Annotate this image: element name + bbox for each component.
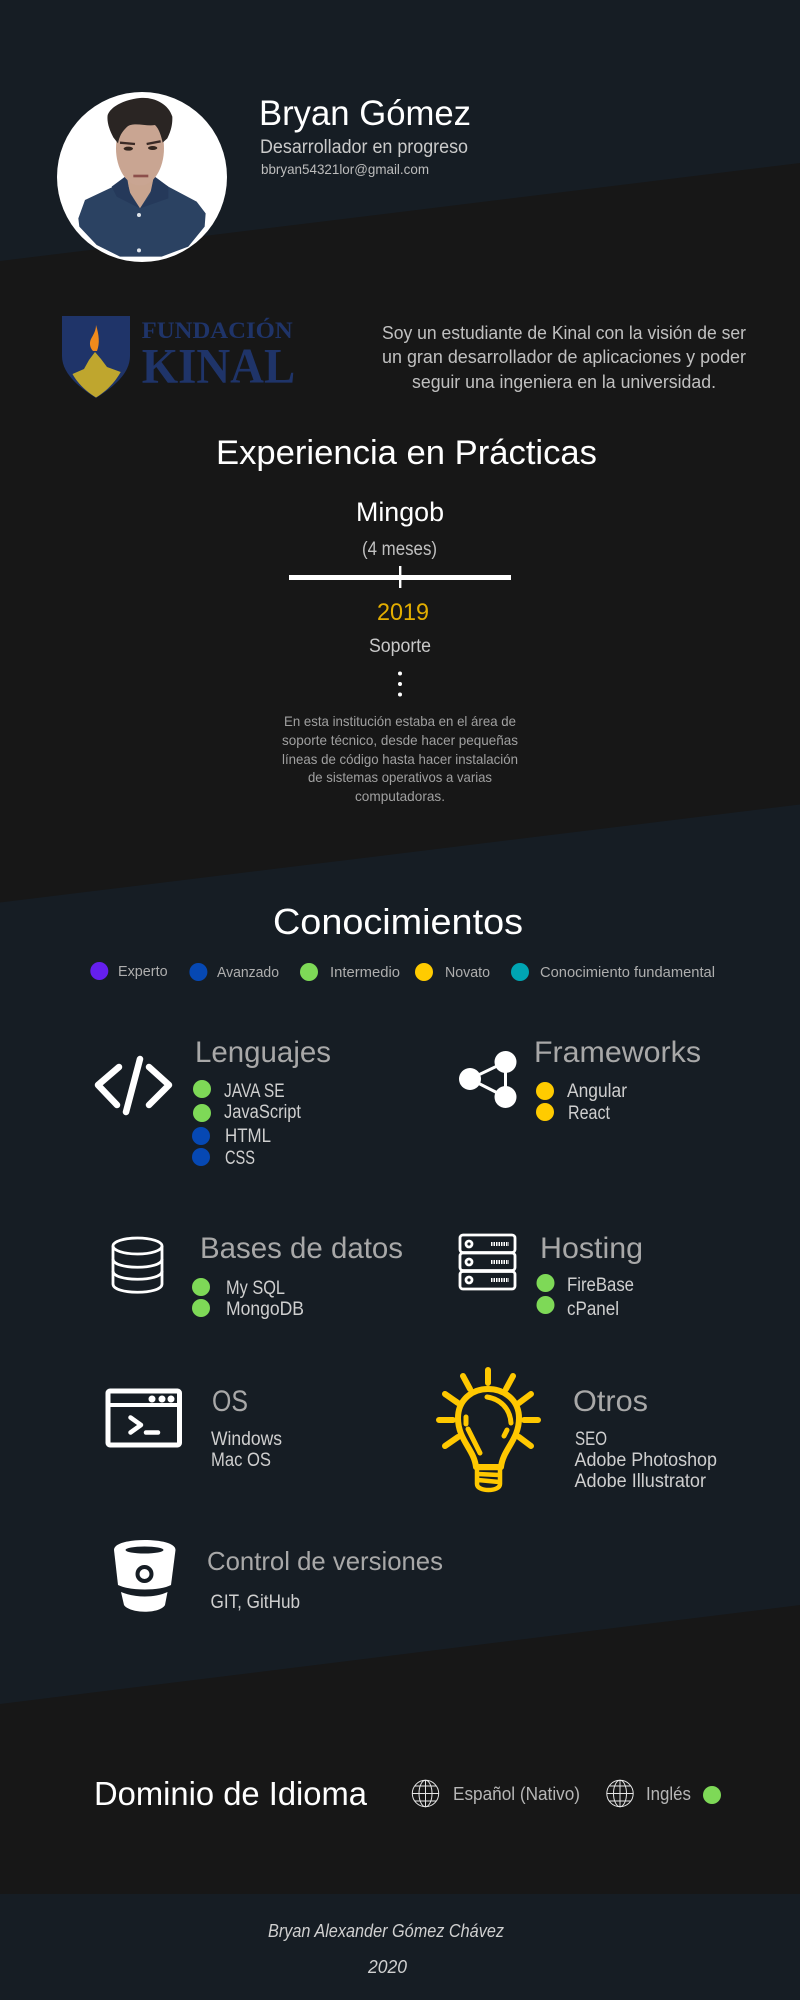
list: operating systems: Windows — [211, 1429, 282, 1450]
experience description: computadoras. — [355, 788, 445, 804]
list: languages: CSS — [225, 1148, 255, 1169]
list: hosting — [536, 1274, 634, 1320]
dots — [398, 672, 402, 696]
list: languages — [192, 1080, 302, 1169]
timeline — [289, 566, 511, 588]
list: languages: JAVA SE — [224, 1081, 285, 1102]
list: hosting: cPanel — [567, 1299, 619, 1320]
legend — [90, 962, 715, 981]
list: other tools — [574, 1429, 717, 1492]
list: frameworks: Angular — [567, 1081, 628, 1102]
icon: server — [460, 1235, 515, 1289]
experience description: En esta institución estaba en el área de — [284, 713, 516, 729]
legend: Novato — [445, 964, 490, 981]
icon: globe — [607, 1780, 633, 1807]
intro paragraph: Soy un estudiante de Kinal con la visión de ser — [382, 323, 746, 343]
list: hosting: FireBase — [567, 1275, 634, 1296]
heading: Conocimientos: Conocimientos — [273, 901, 523, 942]
logo: Fundación Kinal: KINAL — [142, 338, 295, 394]
version control tools: GIT, GitHub — [210, 1592, 300, 1613]
list: databases: My SQL — [226, 1278, 285, 1299]
logo: Fundación Kinal — [62, 316, 295, 398]
legend: Avanzado — [217, 964, 279, 981]
list: frameworks — [536, 1081, 628, 1124]
list: frameworks: React — [568, 1103, 611, 1124]
footer name: Bryan Alexander Gómez Chávez — [268, 1921, 504, 1941]
heading: Hosting: Hosting — [540, 1232, 643, 1265]
list: languages: HTML — [225, 1126, 271, 1147]
list: databases: MongoDB — [226, 1299, 304, 1320]
panel: Otros — [439, 1370, 717, 1492]
icon: bitbucket — [114, 1540, 176, 1612]
logo: Fundación Kinal: FUNDACIÓN — [142, 317, 293, 343]
panel: Bases de datos — [113, 1232, 403, 1320]
legend: Conocimiento fundamental — [540, 964, 715, 981]
icon: terminal — [108, 1391, 180, 1445]
role: Desarrollador en progreso — [260, 137, 468, 158]
heading: Otros: Otros — [573, 1385, 648, 1418]
heading: Bases de datos: Bases de datos — [200, 1232, 403, 1265]
year: 2019 — [377, 599, 429, 626]
icon: database — [113, 1238, 162, 1292]
heading: Frameworks: Frameworks — [534, 1036, 701, 1069]
experience description: líneas de código hasta hacer instalación — [282, 751, 518, 767]
name: Bryan Gómez — [259, 94, 471, 133]
experience description: soporte técnico, desde hacer pequeñas — [282, 732, 518, 748]
icon: globe — [412, 1780, 439, 1807]
heading: Experiencia en Prácticas: Experiencia en Prácticas — [216, 434, 597, 472]
icon: code — [98, 1059, 169, 1112]
icon: share nodes — [459, 1051, 516, 1108]
experience description — [282, 713, 518, 804]
legend: Experto — [118, 963, 168, 980]
panel: Lenguajes — [98, 1036, 331, 1169]
language: Español — [412, 1780, 580, 1807]
list: other tools: Adobe Photoshop — [574, 1450, 717, 1471]
panel: Hosting — [460, 1232, 643, 1320]
duration: (4 meses) — [362, 539, 437, 560]
list: databases — [192, 1278, 304, 1320]
profile photo — [57, 92, 227, 262]
list: other tools: SEO — [575, 1429, 607, 1450]
list: other tools: Adobe Illustrator — [574, 1471, 707, 1492]
legend: Intermedio — [330, 964, 400, 981]
heading: Dominio de Idioma: Dominio de Idioma — [94, 1775, 368, 1812]
area: Soporte — [369, 636, 431, 657]
label: Español: Español (Nativo) — [453, 1784, 580, 1804]
list: operating systems — [211, 1429, 282, 1471]
panel: Control de versiones — [114, 1540, 443, 1613]
intro paragraph — [382, 323, 746, 392]
intro paragraph: seguir una ingeniera en la universidad. — [412, 372, 716, 392]
email: bbryan54321lor@gmail.com — [261, 161, 429, 177]
language: Inglés — [607, 1780, 721, 1807]
heading: Control de versiones: Control de versiones — [207, 1546, 443, 1576]
panel: OS — [108, 1385, 282, 1471]
footer year: 2020 — [367, 1957, 407, 1977]
panel: Frameworks — [459, 1036, 701, 1124]
list: languages: JavaScript — [224, 1102, 302, 1123]
experience description: de sistemas operativos a varias — [308, 769, 492, 785]
list: operating systems: Mac OS — [211, 1450, 271, 1471]
level dot — [703, 1786, 721, 1804]
heading: Lenguajes: Lenguajes — [195, 1036, 331, 1069]
panel: knowledge band — [0, 804, 800, 1704]
icon: light bulb — [439, 1370, 538, 1490]
panel: header band — [0, 0, 800, 261]
intro paragraph: un gran desarrollador de aplicaciones y poder — [382, 347, 746, 367]
company: Mingob — [356, 497, 444, 527]
heading: OS: OS — [212, 1385, 248, 1418]
panel: footer band — [0, 1894, 800, 2000]
label: Inglés: Inglés — [646, 1784, 691, 1804]
